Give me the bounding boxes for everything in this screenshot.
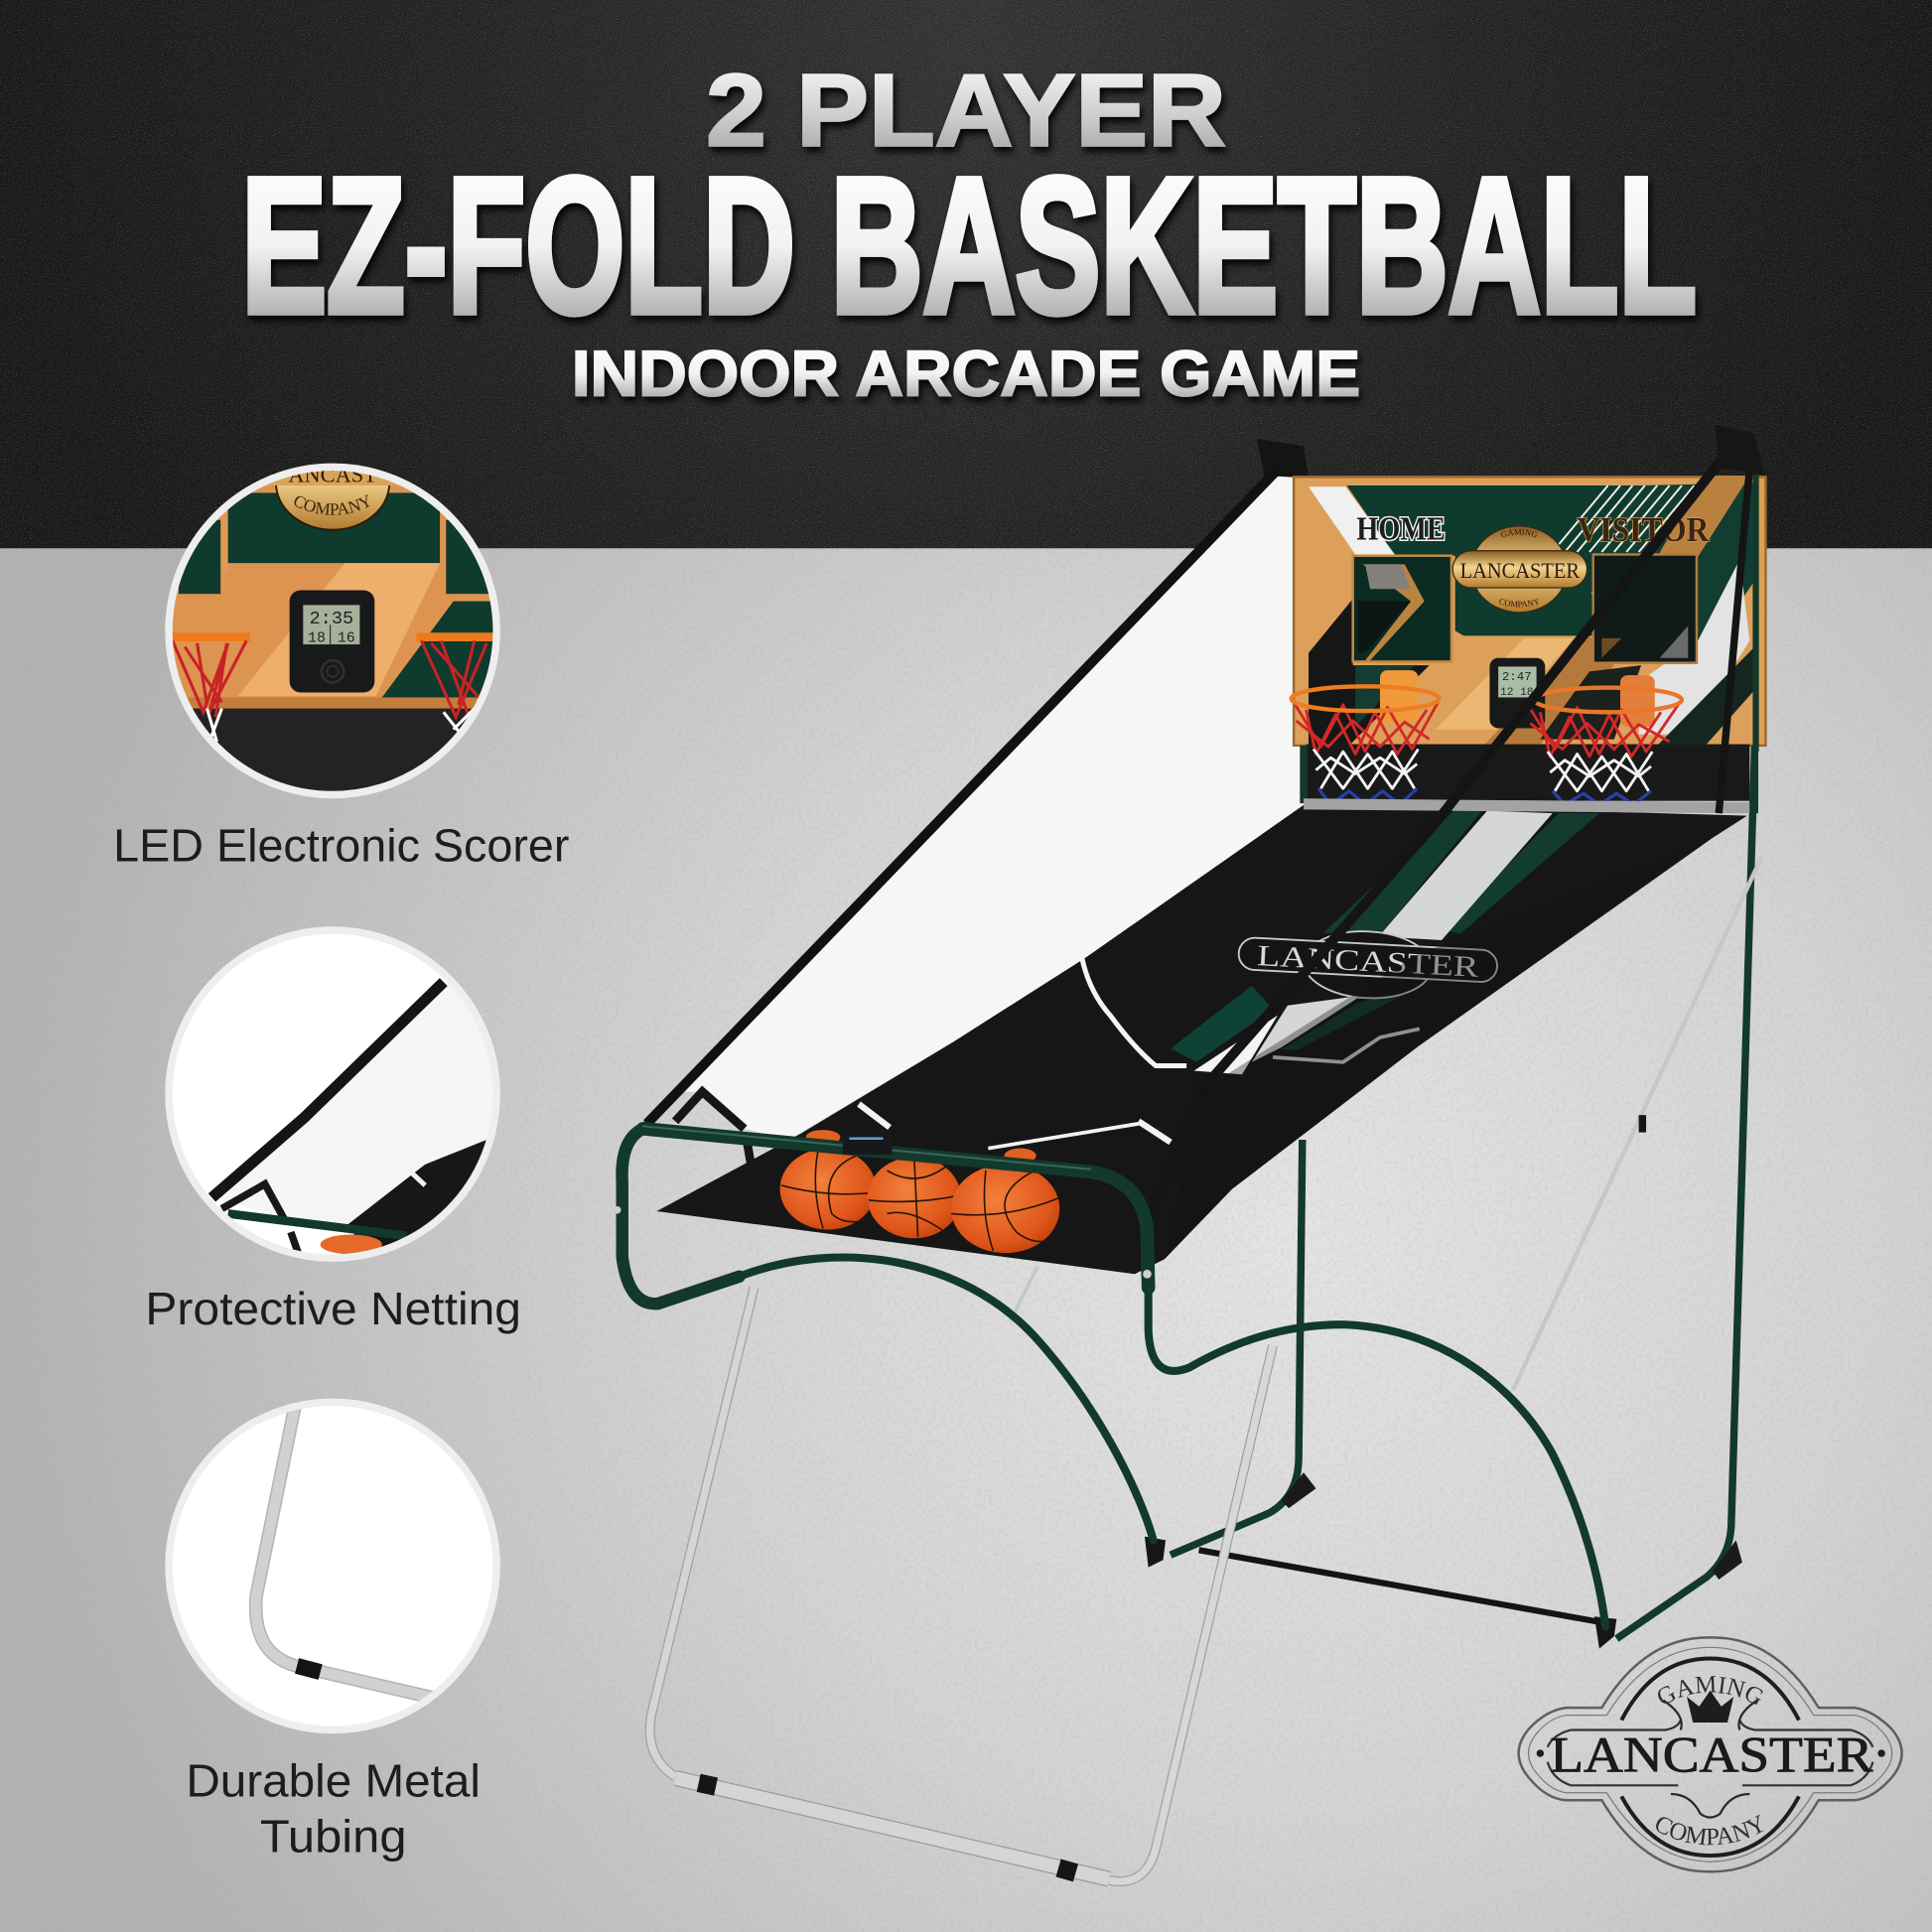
visitor window xyxy=(1593,554,1697,663)
gold badge crop xyxy=(275,485,390,531)
white corner band xyxy=(1309,486,1395,554)
green stripe xyxy=(1323,811,1482,936)
text: visitor: VISITOR xyxy=(1578,510,1710,549)
logo: Lancaster Gaming Company xyxy=(1517,1636,1903,1872)
title: 2 player: 2 PLAYER xyxy=(706,53,1226,167)
electronic scorer: 2:47 xyxy=(1502,670,1532,684)
panel: durable metal tubing xyxy=(160,1392,505,1862)
left dark band xyxy=(1309,599,1430,745)
title: indoor arcade game: INDOOR ARCADE GAME xyxy=(572,338,1360,409)
logo wordmark: LANCASTER xyxy=(1550,1728,1872,1784)
logo lower word: COMPANY xyxy=(1656,1815,1763,1845)
panel: LED electronic scorer xyxy=(113,463,569,872)
white mesh stripe xyxy=(1379,811,1553,940)
gold Lancaster badge: GAMING xyxy=(1501,528,1537,538)
circular detail photo: scoreboard: 2:35 xyxy=(310,609,353,629)
white court lines xyxy=(1082,957,1186,1066)
ball ramp fabric xyxy=(656,803,1747,1274)
circular detail photo: scoreboard: ANCAST xyxy=(288,462,377,486)
electronic scorer: 12 18 xyxy=(1500,687,1534,699)
circular detail photo: tube xyxy=(173,1406,492,1726)
hoop crops xyxy=(160,633,250,640)
background: grey lower section xyxy=(0,542,1932,1932)
gold Lancaster badge xyxy=(1451,525,1587,614)
back posts and base xyxy=(1145,752,1754,1649)
scorer device xyxy=(290,590,374,692)
circular detail photo: scoreboard: COMPANY xyxy=(294,494,370,515)
home window xyxy=(1353,556,1451,661)
small orange backboards xyxy=(1380,670,1655,727)
panel: protective netting xyxy=(145,924,521,1334)
label: Durable Metal xyxy=(186,1754,481,1806)
basketballs xyxy=(780,1130,1059,1253)
ramp logo: LANCASTER xyxy=(1256,939,1479,984)
silver support struts xyxy=(1011,857,1762,1390)
gold diagonal band xyxy=(1657,476,1749,557)
label: Protective Netting xyxy=(145,1283,521,1334)
silver folding legs xyxy=(650,1288,1273,1881)
top silver cross bar xyxy=(1304,798,1749,813)
background: dark textured header band xyxy=(0,0,1932,548)
logo upper word: GAMING xyxy=(1658,1676,1763,1705)
circular detail photo: netting xyxy=(173,933,492,1255)
flourishes xyxy=(1663,1701,1757,1818)
ball 3 xyxy=(951,1165,1059,1253)
label: Tubing xyxy=(260,1810,407,1862)
gold Lancaster badge: LANCASTER xyxy=(1460,558,1580,583)
dark band xyxy=(1658,647,1754,745)
ball 2 xyxy=(868,1157,961,1238)
text: home: HOME xyxy=(1356,511,1446,548)
label: LED Electronic Scorer xyxy=(113,820,569,872)
green panel xyxy=(1346,485,1639,635)
protective side netting xyxy=(647,439,1309,1169)
circular detail photo: scoreboard: 18 xyxy=(308,631,326,647)
ramp logo xyxy=(1237,924,1498,1005)
electronic scorer xyxy=(1489,658,1545,728)
left post and right post tops xyxy=(1304,746,1754,813)
crown xyxy=(1687,1691,1733,1723)
circular detail photo: scoreboard xyxy=(173,471,492,791)
green tube frame xyxy=(614,1126,1605,1626)
circular detail photo: scoreboard: 16 xyxy=(338,631,355,647)
product: basketball arcade game xyxy=(616,426,1767,1886)
diagonal white hatching xyxy=(1553,485,1694,594)
white splatter band xyxy=(1639,559,1749,735)
gold Lancaster badge: COMPANY xyxy=(1499,598,1539,608)
black backing under board xyxy=(1307,745,1749,801)
ball 1 xyxy=(780,1149,876,1230)
right hoop and net xyxy=(1528,688,1682,804)
backboard with graphics xyxy=(1293,476,1767,747)
front mesh net strap xyxy=(1140,425,1764,1259)
left hoop and net xyxy=(1292,686,1440,804)
